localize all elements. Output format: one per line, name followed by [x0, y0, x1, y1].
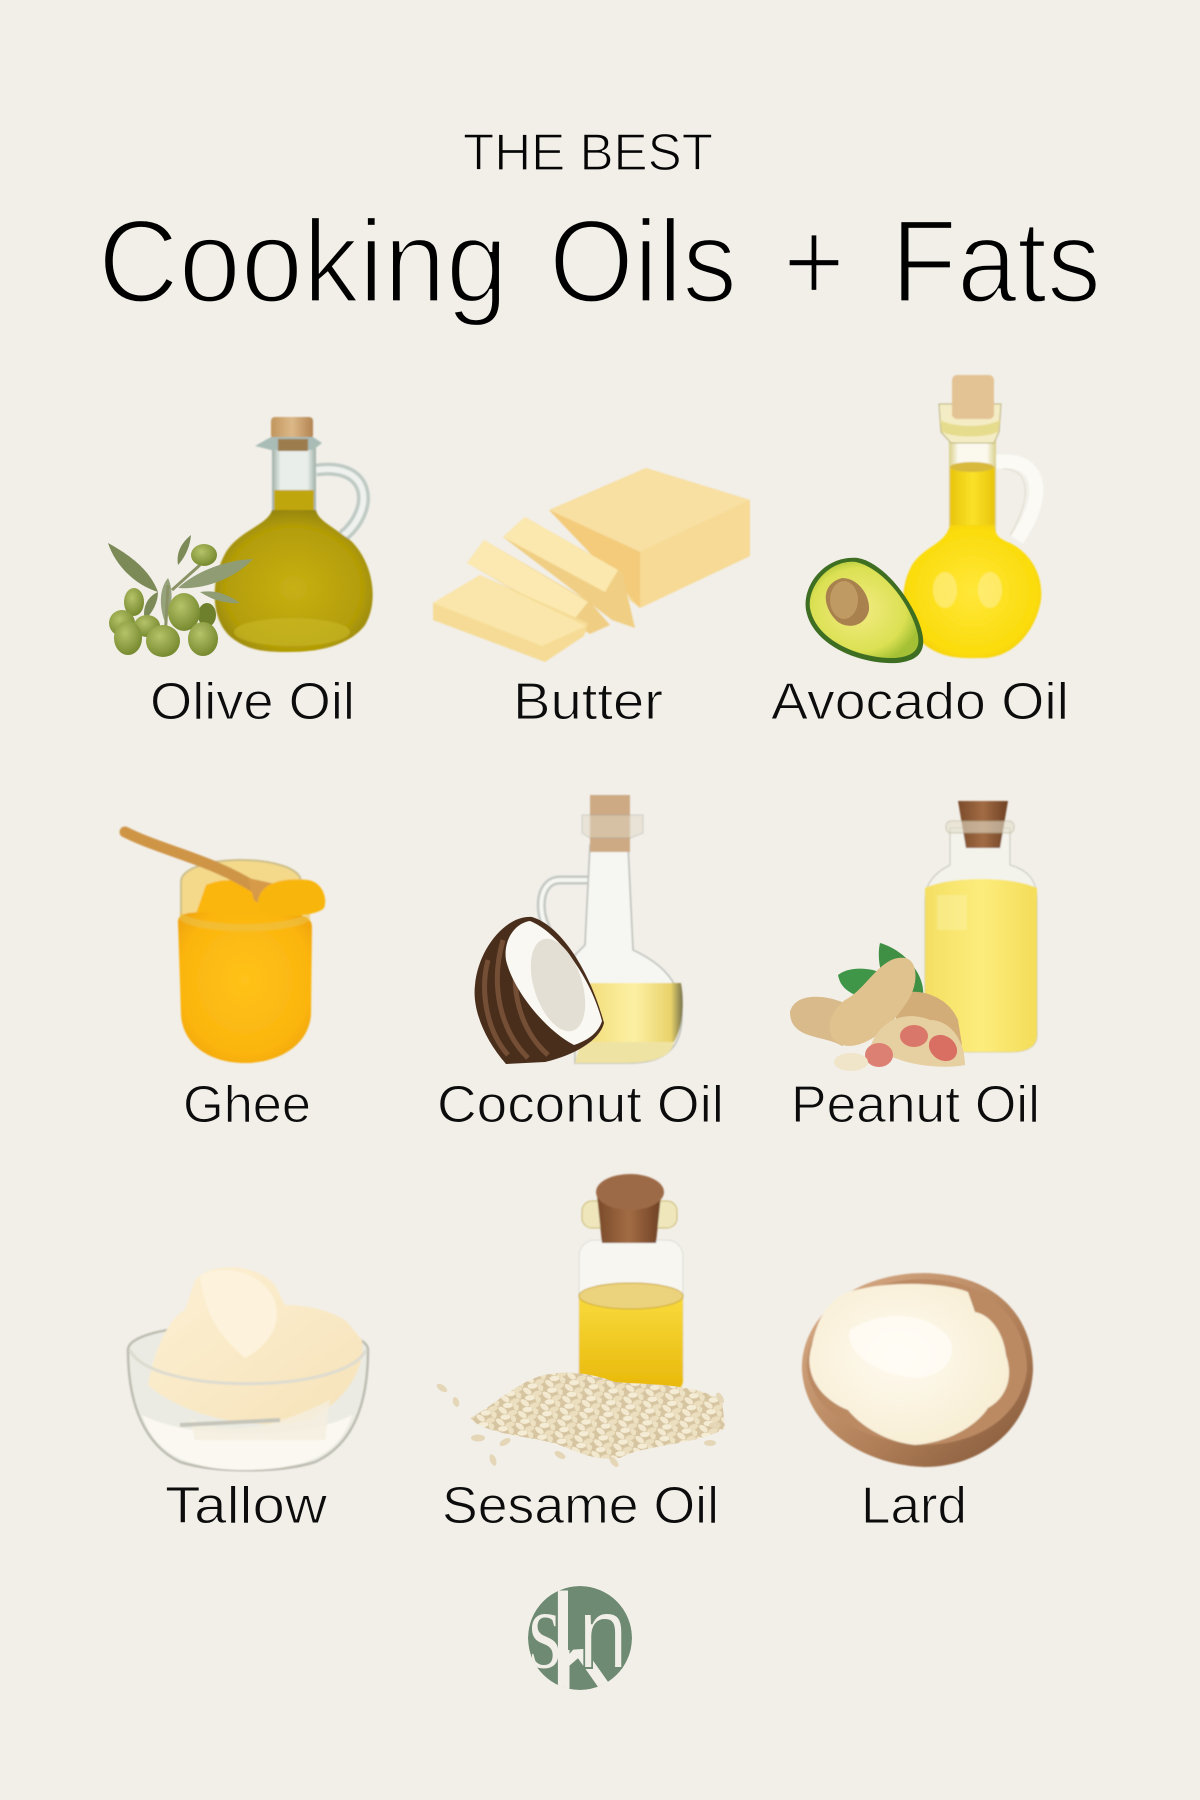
icon: avocado half [806, 558, 923, 663]
label: Ghee [183, 1076, 311, 1134]
icon: butter block and slices [433, 468, 750, 662]
panel: peanut oil [790, 801, 1040, 1134]
main heading: Oils [549, 196, 737, 328]
panel: butter [433, 468, 750, 731]
label: Avocado Oil [771, 673, 1069, 731]
main heading [98, 196, 1101, 328]
icon: ghee jar with spoon [125, 832, 325, 1063]
logo [528, 1586, 632, 1690]
label: Butter [513, 673, 663, 731]
logo: n [578, 1576, 628, 1690]
icon: peanut oil bottle [925, 801, 1037, 1052]
main heading: + [783, 196, 845, 328]
panel: ghee [125, 832, 325, 1134]
label: Lard [861, 1477, 967, 1535]
logo: s [528, 1566, 562, 1694]
icon: olive oil bottle [215, 417, 373, 652]
icon: sesame oil bottle [579, 1174, 683, 1392]
panel: olive oil [108, 417, 373, 731]
icon: lard in wooden bowl [802, 1273, 1033, 1467]
label: Olive Oil [150, 673, 355, 731]
label: Coconut Oil [437, 1076, 724, 1134]
label: Sesame Oil [442, 1477, 719, 1535]
panel: lard [802, 1273, 1033, 1535]
main heading: Fats [891, 196, 1101, 328]
main heading: Cooking [98, 196, 508, 328]
title [98, 124, 1101, 328]
icon: tallow in glass bowl [128, 1267, 368, 1470]
label: Peanut Oil [791, 1076, 1040, 1134]
title kicker: THE BEST [463, 124, 713, 182]
icon: olives and leaves [108, 535, 253, 657]
icon: sesame seeds [435, 1373, 726, 1469]
icon: peanuts and leaves [790, 943, 965, 1071]
logo: k [549, 1565, 616, 1722]
icon: coconut half [475, 917, 604, 1064]
label: Tallow [165, 1477, 327, 1535]
panel: sesame oil [435, 1174, 726, 1535]
icon: coconut oil bottle [541, 795, 683, 1063]
icon: avocado oil bottle [903, 375, 1041, 658]
panel: coconut oil [437, 795, 724, 1134]
panel: avocado oil [771, 375, 1069, 731]
panel: tallow [128, 1267, 368, 1535]
